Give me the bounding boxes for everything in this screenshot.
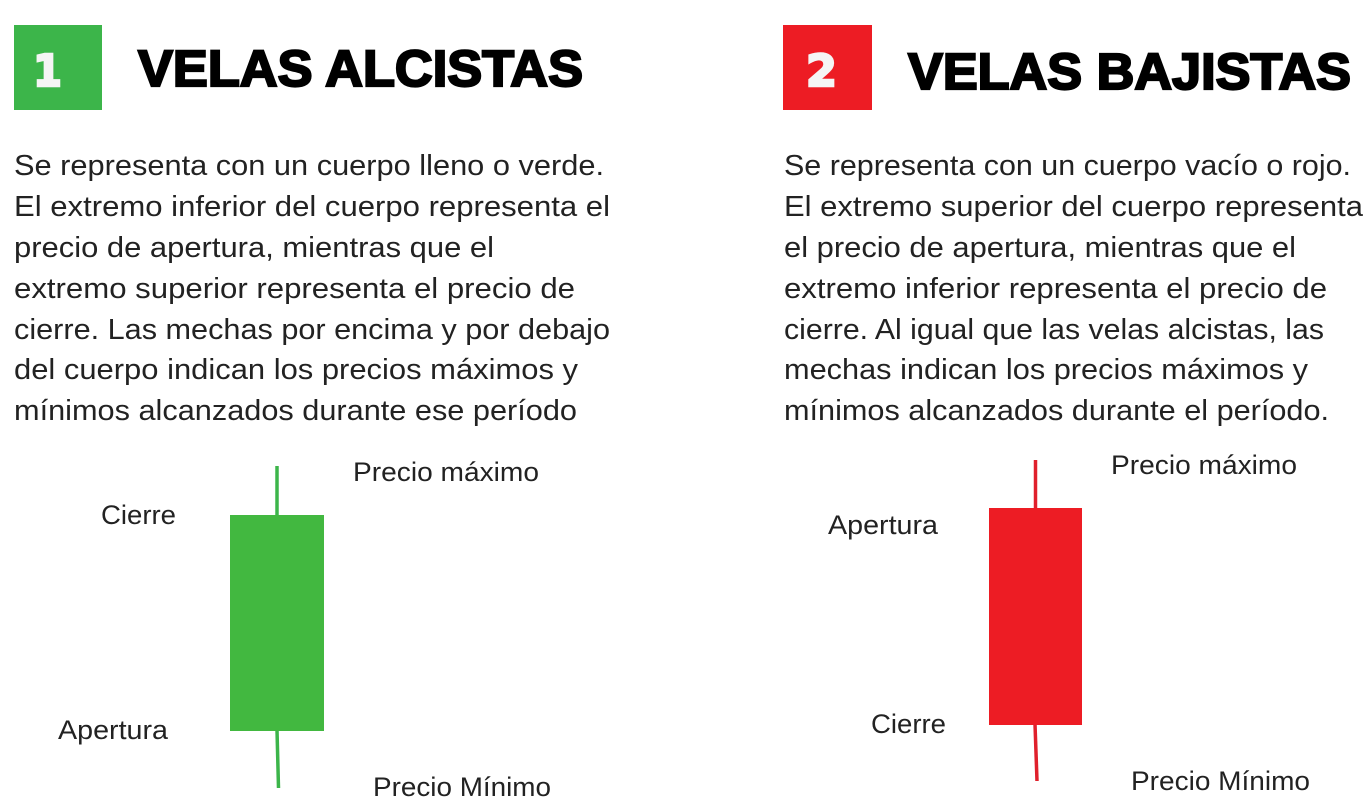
icon: number 1 badge [14, 25, 102, 110]
heading: velas alcistas: VELAS ALCISTAS [138, 40, 583, 97]
text block: bearish description: Se representa con un cuerpo vacío o rojo. [784, 150, 1351, 182]
text block: bullish description: Se representa con un cuerpo lleno o verde. [14, 150, 604, 182]
chart: red candlestick [989, 460, 1082, 781]
text block: bearish description: mechas indican los precios máximos y [784, 354, 1309, 386]
chart: green candlestick [230, 466, 324, 788]
icon: number 1 badge: 1 [33, 46, 62, 97]
text block: bullish description: cierre. Las mechas por encima y por debajo [14, 314, 610, 346]
text block: bullish description [14, 150, 610, 427]
label: apertura: Apertura [58, 715, 169, 745]
label: precio máximo: Precio máximo [1111, 450, 1297, 480]
label: precio mínimo: Precio Mínimo [1131, 766, 1310, 796]
text block: bullish description: del cuerpo indican los precios máximos y [14, 354, 579, 386]
label: cierre: Cierre [871, 709, 946, 739]
text block: bullish description: El extremo inferior del cuerpo representa el [14, 191, 610, 223]
text block: bearish description: cierre. Al igual que las velas alcistas, las [784, 314, 1324, 346]
heading: velas bajistas: VELAS BAJISTAS [908, 43, 1351, 100]
panel: velas alcistas [14, 25, 610, 802]
text block: bearish description: mínimos alcanzados durante el período. [784, 395, 1329, 427]
icon: number 2 badge: 2 [806, 46, 837, 97]
label: apertura: Apertura [828, 510, 939, 540]
label: cierre: Cierre [101, 500, 176, 530]
text block: bullish description: extremo superior representa el precio de [14, 273, 575, 305]
text block: bullish description: mínimos alcanzados durante ese período [14, 395, 577, 427]
text block: bearish description [784, 150, 1363, 427]
label: precio mínimo: Precio Mínimo [373, 772, 551, 802]
text block: bearish description: extremo inferior representa el precio de [784, 273, 1327, 305]
label: precio máximo: Precio máximo [353, 457, 539, 487]
text block: bearish description: el precio de apertura, mientras que el [784, 232, 1296, 264]
icon: number 2 badge [783, 25, 872, 110]
panel: velas bajistas [783, 25, 1363, 796]
text block: bullish description: precio de apertura, mientras que el [14, 232, 494, 264]
text block: bearish description: El extremo superior del cuerpo representa [784, 191, 1363, 223]
